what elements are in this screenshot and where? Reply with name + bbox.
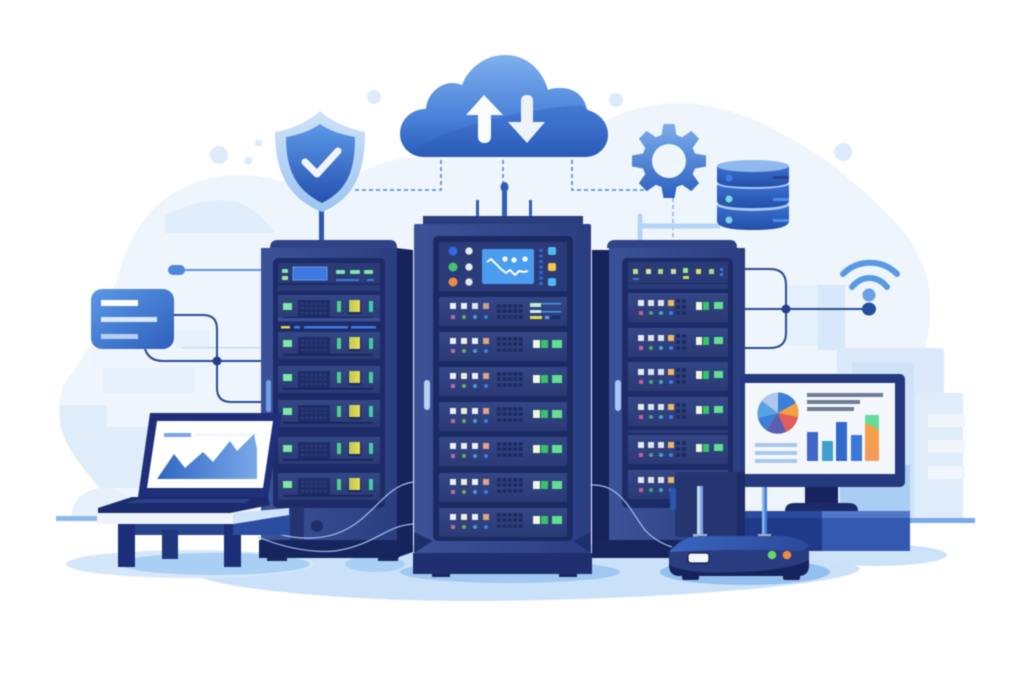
- server units: [628, 293, 728, 499]
- connector lines left: [145, 270, 262, 402]
- bar chart: [807, 415, 879, 461]
- monitor with dashboard: [740, 374, 905, 511]
- mini screen with waveform: [482, 249, 534, 284]
- area chart: [157, 433, 258, 479]
- top status panel: [628, 262, 728, 289]
- top control panel: [439, 242, 567, 291]
- router: [669, 472, 809, 580]
- server units: [278, 295, 380, 500]
- icon: message card: [91, 289, 174, 349]
- icon: database: [717, 160, 789, 230]
- right server rack: [592, 240, 745, 558]
- server units: [439, 297, 567, 537]
- icon: shield with check: [275, 111, 365, 241]
- icon: cloud with arrows: [400, 55, 608, 157]
- legend lines: [755, 443, 797, 463]
- shelf pipe behind right rack: [640, 216, 720, 240]
- ground shadows: [66, 544, 947, 601]
- arrow down: [508, 95, 545, 143]
- laptop: [98, 413, 282, 513]
- laptop table: [97, 508, 289, 567]
- center server rack: [413, 182, 592, 577]
- icon: gear: [632, 124, 706, 198]
- background: pale blobs: [56, 90, 975, 523]
- text lines: [807, 393, 883, 411]
- pie chart: [758, 392, 798, 434]
- dashed connectors: [355, 160, 673, 242]
- monitor desk: [735, 511, 910, 551]
- cables: [258, 482, 672, 551]
- top status panel: [278, 263, 380, 291]
- icon: wifi: [843, 263, 897, 316]
- connector lines right: [745, 269, 868, 348]
- icon: left pill node: [168, 265, 185, 275]
- left server rack: [259, 240, 413, 561]
- arrow up: [466, 95, 503, 143]
- first unit with meters: [439, 297, 567, 326]
